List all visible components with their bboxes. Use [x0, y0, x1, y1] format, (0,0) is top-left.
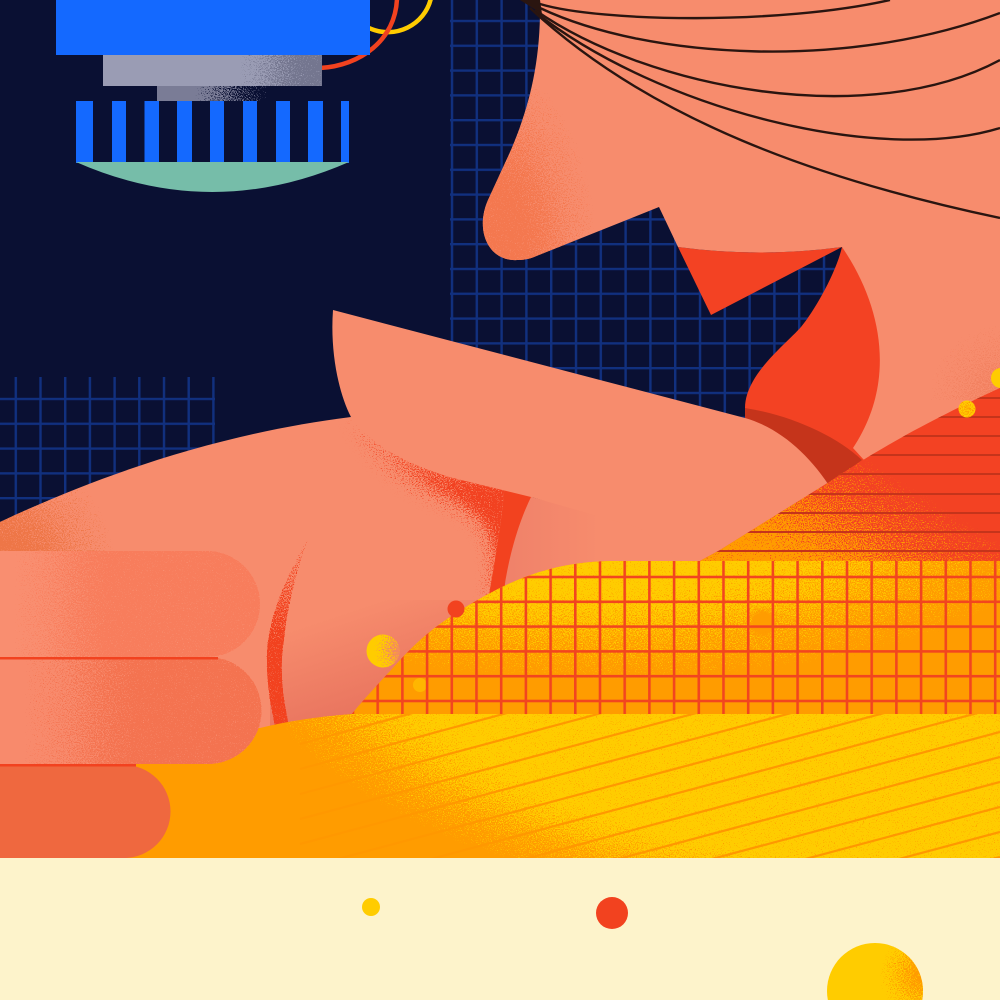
hand: left shading	[0, 488, 112, 551]
hand: knuckle crease	[267, 537, 309, 730]
dot: red	[596, 897, 628, 929]
red crescent	[470, 470, 535, 620]
wires	[320, 0, 431, 68]
dot: yellow on hand	[366, 634, 400, 668]
lip	[678, 247, 842, 315]
base: diagonal lines	[301, 714, 1000, 858]
finger 2	[0, 657, 262, 764]
face	[483, 0, 1000, 460]
dot: large yellow	[827, 943, 923, 1000]
nose shading	[482, 84, 594, 260]
neck shadow: dark red	[745, 408, 862, 484]
thumb base	[503, 497, 720, 620]
grid: upper navy	[450, 0, 840, 430]
neck shading	[932, 326, 1000, 400]
cream floor	[0, 858, 1000, 1000]
hair strands	[520, 0, 1000, 218]
cloth: orange grain dot	[746, 605, 780, 639]
striped base	[126, 714, 1000, 858]
cloth: yellow grain	[398, 561, 1000, 680]
dot: red on hand	[448, 600, 464, 618]
machine: grey block	[103, 55, 322, 86]
index finger	[332, 310, 832, 575]
hand: crease shadow under finger	[345, 420, 504, 600]
grid: left navy	[0, 377, 215, 527]
machine: small grey block	[157, 86, 266, 101]
cloth: red grid	[340, 555, 1000, 715]
finger 3	[0, 765, 170, 858]
hand	[0, 417, 504, 728]
base: yellow grain	[250, 710, 1000, 860]
shirt	[690, 380, 1000, 565]
shirt: orange grain	[700, 459, 1000, 561]
neck shadow: red	[745, 247, 900, 482]
cloth: small yellow dot	[413, 678, 427, 692]
hand: lower shading	[270, 614, 450, 726]
finger 1	[0, 551, 260, 657]
machine: teal dome	[76, 162, 349, 192]
finger creases	[0, 657, 218, 766]
machine: blue housing	[56, 0, 370, 55]
yellow dots at neck	[958, 368, 1000, 418]
grid cloth	[340, 555, 1000, 715]
dot: small yellow	[362, 898, 380, 916]
shirt: stripes	[690, 398, 1000, 551]
machine: blue stripes	[76, 101, 349, 163]
